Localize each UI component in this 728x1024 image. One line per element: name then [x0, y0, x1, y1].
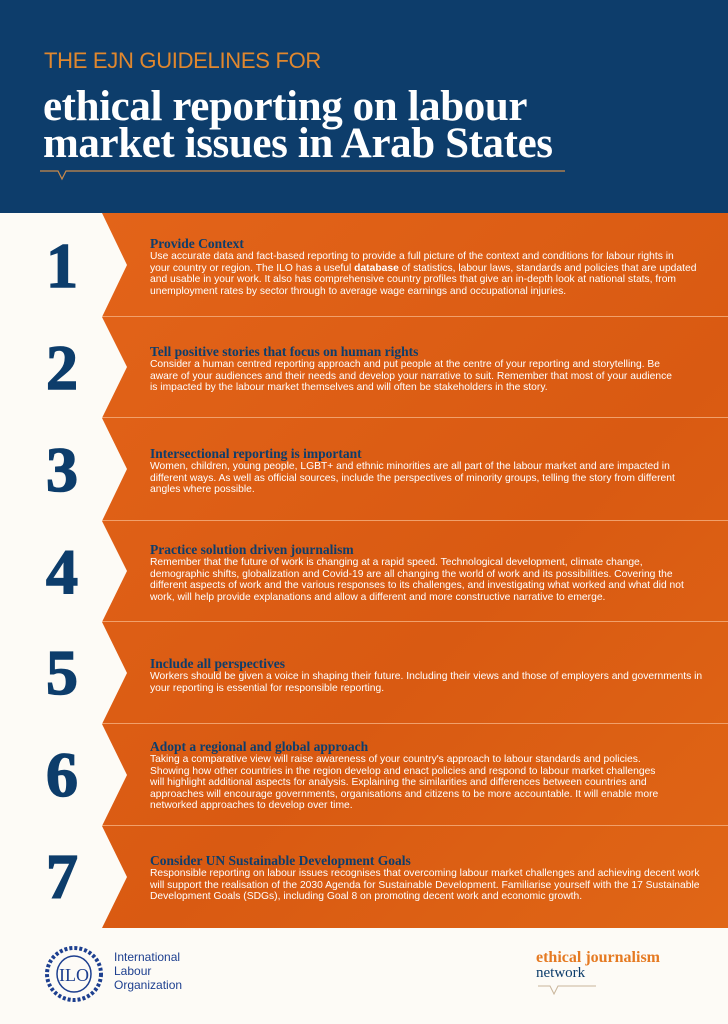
text 1: Use accurate data and fact-based reporting to provide a full picture of the context and conditions for labour rights in [150, 251, 674, 262]
text 1: Provide Context [150, 236, 244, 251]
row 7 [0, 826, 700, 928]
kicker: THE EJN GUIDELINES FOR [44, 48, 321, 73]
text 6: Taking a comparative view will raise awareness of your country's approach to labour standards and policies. [150, 754, 641, 765]
text 7: Consider UN Sustainable Development Goals [150, 853, 411, 868]
row 2 [0, 317, 728, 418]
row 6: 6 [46, 739, 78, 810]
text 5 [150, 656, 702, 694]
row 5: 5 [46, 637, 78, 708]
text 2: aware of your audiences and their needs and develop your narrative to suit. Remember that most of your audience [150, 371, 672, 382]
title [43, 83, 553, 167]
text 6 [150, 739, 658, 811]
text 6: Adopt a regional and global approach [150, 739, 368, 754]
text 6: Showing how other countries in the region develop and enact policies and respond to labour market challenges [150, 766, 655, 777]
text 2: Consider a human centred reporting approach and put people at the centre of your reporting and storytelling. Be [150, 359, 660, 370]
row 7: 7 [46, 841, 78, 912]
row 1 [0, 213, 728, 317]
ILO logo: ILO [59, 965, 89, 985]
text 4: different aspects of work and the various responses to its challenges, and investigating what worked and what did not [150, 580, 684, 591]
text 7: will support the realisation of the 2030 Agenda for Sustainable Development. Familiarise yourself with the 17 Sustainable [150, 880, 700, 891]
orange background [0, 213, 728, 928]
text 1: and usable in your work. It also has comprehensive country profiles that give an in-depth look at national stats, from [150, 274, 676, 285]
ILO logo [45, 946, 182, 1002]
text 7: Development Goals (SDGs), including Goal 8 on promoting decent work and economic growth. [150, 891, 582, 902]
text 3: different ways. As well as official sources, include the perspectives of minority groups, telling the story from different [150, 473, 675, 484]
EJN logo: ethical journalism [536, 949, 660, 966]
text 6: will highlight additional aspects for analysis. Explaining the similarities and differences between countries and [150, 777, 647, 788]
text 3: Intersectional reporting is important [150, 446, 362, 461]
text 2: is impacted by the labour market themselves and will often be stakeholders in the story. [150, 382, 548, 393]
text 4: Remember that the future of work is changing at a rapid speed. Technological development, climate change, [150, 557, 643, 568]
row 1: 1 [46, 230, 78, 301]
text 1: your country or region. The ILO has a useful database of statistics, labour laws, standards and policies that are updated [150, 263, 696, 274]
title: market issues in Arab States [43, 120, 553, 167]
text 3: Women, children, young people, LGBT+ and ethnic minorities are all part of the labour market and are impacted in [150, 461, 670, 472]
title underline with speech tail [40, 170, 565, 180]
row 6 [0, 724, 728, 826]
text 6: approaches will encourage governments, organisations and citizens to be more accountable. It will enable more [150, 789, 658, 800]
ILO logo: International [114, 950, 180, 964]
row 3: 3 [46, 434, 78, 505]
text 5: your reporting is essential for responsible reporting. [150, 683, 384, 694]
text 4 [150, 542, 684, 603]
text 7: Responsible reporting on labour issues recognises that overcoming labour market challenges and achieving decent work [150, 868, 699, 879]
title: ethical reporting on labour [43, 83, 527, 130]
header [0, 0, 728, 213]
text 3: angles where possible. [150, 484, 255, 495]
text 7 [150, 853, 700, 902]
text 1 [150, 236, 696, 297]
text 5: Workers should be given a voice in shaping their future. Including their views and those of employers and governments in [150, 671, 702, 682]
text 4: work, will help provide explanations and allow a different and more constructive narrative to emerge. [150, 592, 605, 603]
ILO logo: Organization [114, 978, 182, 992]
text 4: demographic shifts, globalization and Covid-19 are all changing the world of work and its possibilities. Covering the [150, 569, 673, 580]
row 4: 4 [46, 536, 78, 607]
ILO logo: Labour [114, 964, 151, 978]
row 4 [0, 521, 728, 622]
text 5: Include all perspectives [150, 656, 285, 671]
footer [0, 928, 728, 1024]
EJN logo [536, 949, 660, 995]
text 4: Practice solution driven journalism [150, 542, 354, 557]
text 2: Tell positive stories that focus on human rights [150, 344, 418, 359]
text 3 [150, 446, 675, 495]
row 5 [0, 622, 728, 724]
text 1: unemployment rates by sector through to average wage earnings and occupational injuries. [150, 286, 566, 297]
row 2: 2 [46, 332, 78, 403]
row 3 [0, 418, 728, 521]
text 2 [150, 344, 672, 393]
text 6: networked approaches to develop over time. [150, 800, 353, 811]
EJN logo: network [536, 965, 585, 981]
